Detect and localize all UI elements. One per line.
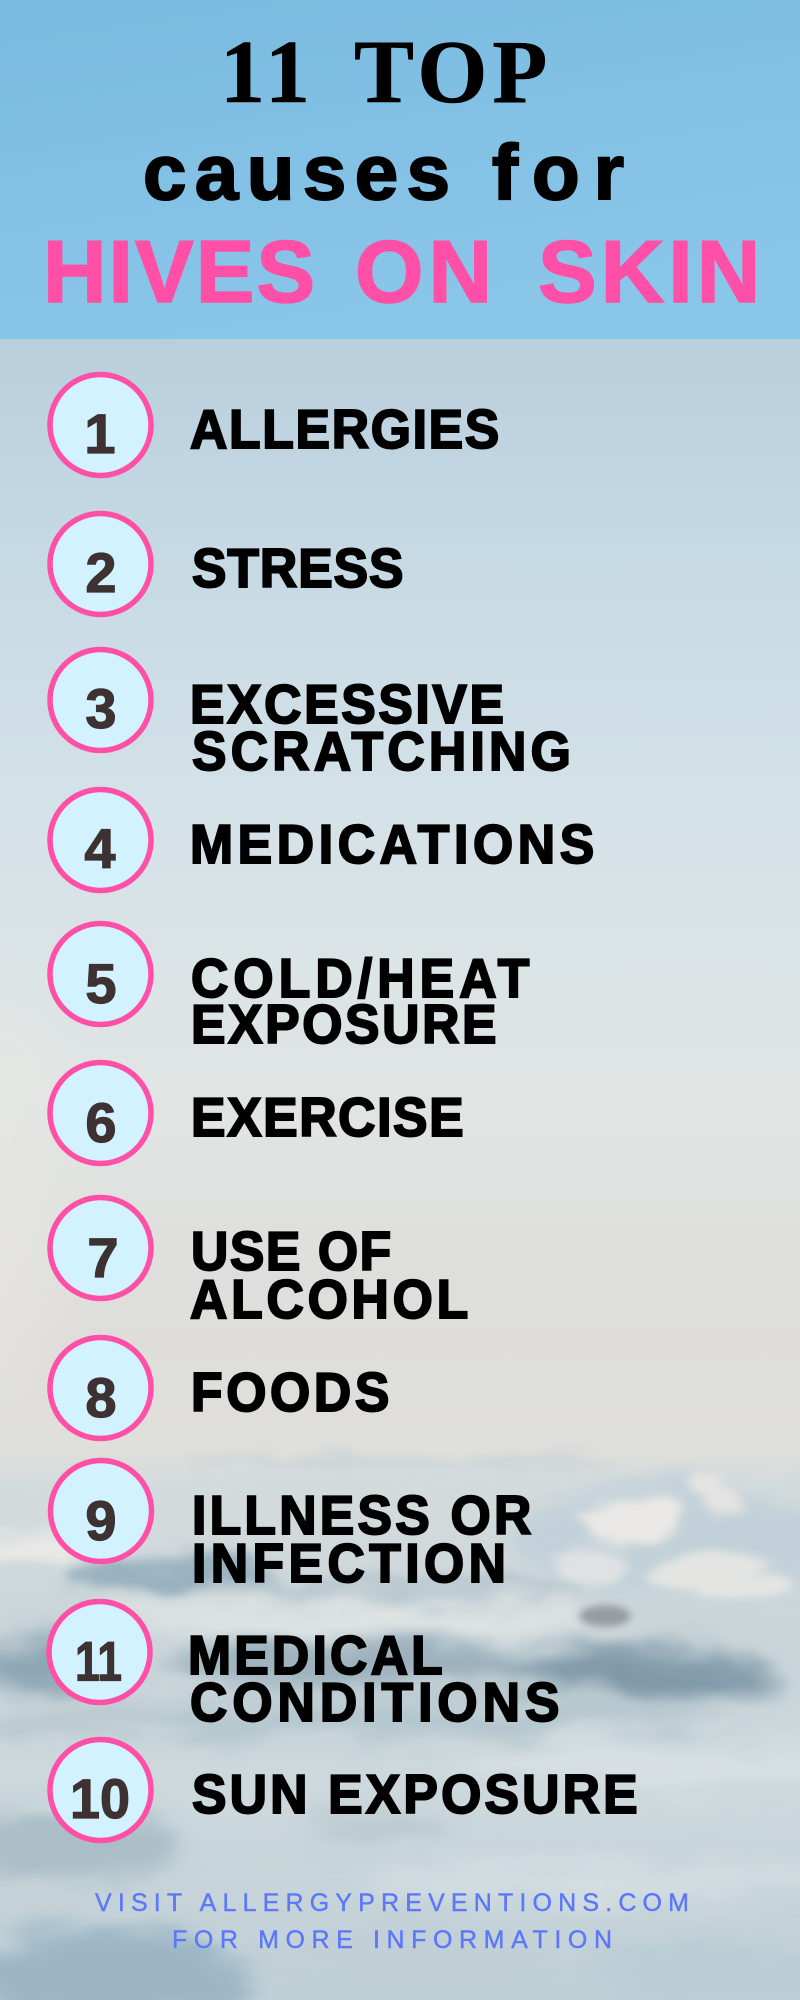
label: cold/heat exposure: EXPOSURE	[191, 995, 497, 1055]
label: use of alcohol	[190, 1222, 468, 1330]
badge 4	[50, 790, 151, 890]
label: medical conditions: MEDICAL	[188, 1626, 443, 1686]
label: medical conditions: CONDITIONS	[190, 1673, 559, 1733]
badge 9	[50, 1460, 152, 1562]
label: excessive scratching	[190, 675, 571, 782]
footer line 2: FOR MORE INFORMATION	[172, 1926, 612, 1954]
badge 1	[50, 374, 151, 476]
label: illness or infection: INFECTION	[192, 1534, 506, 1594]
label: cold/heat exposure	[191, 949, 530, 1055]
badge 1: 1	[84, 402, 116, 465]
item 1: allergies	[50, 374, 499, 476]
item 7: use of alcohol	[50, 1198, 468, 1330]
footer call to action	[95, 1889, 689, 1954]
badge 6: 6	[85, 1091, 117, 1154]
label: medications: MEDICATIONS	[190, 815, 594, 875]
badge 9: 9	[85, 1489, 117, 1552]
badge 7	[50, 1198, 151, 1298]
badge 11: 11	[75, 1630, 122, 1692]
badge 3	[50, 650, 151, 750]
item 10: sun exposure	[50, 1740, 638, 1840]
title line 2: causes for: causes	[143, 128, 459, 216]
title line 3: HIVES ON SKIN: ON	[355, 222, 497, 321]
badge 11	[49, 1602, 150, 1702]
badge 10	[50, 1740, 151, 1840]
label: excessive scratching: EXCESSIVE	[190, 675, 504, 735]
label: excessive scratching: SCRATCHING	[192, 722, 571, 782]
item 4: medications	[50, 790, 594, 890]
badge 8: 8	[85, 1366, 117, 1429]
badge 2: 2	[85, 541, 117, 604]
badge 5: 5	[85, 952, 117, 1015]
label: use of alcohol: ALCOHOL	[190, 1270, 468, 1330]
title line 1: 11 TOP: 11	[220, 23, 315, 122]
title line 3: HIVES ON SKIN: HIVES	[43, 222, 317, 321]
item 8: foods	[50, 1338, 389, 1438]
label: illness or infection	[192, 1486, 531, 1594]
footer line 1: VISIT ALLERGYPREVENTIONS.COM	[95, 1889, 689, 1917]
label: cold/heat exposure: COLD/HEAT	[191, 949, 530, 1009]
cloud layer	[0, 1458, 800, 2000]
badge 5	[50, 924, 151, 1024]
label: allergies: ALLERGIES	[190, 400, 499, 460]
title line 3: HIVES ON SKIN: SKIN	[538, 222, 764, 321]
label: stress: STRESS	[192, 539, 403, 599]
label: use of alcohol: USE OF	[191, 1222, 391, 1282]
item 11: medical conditions	[49, 1602, 559, 1733]
item 6: exercise	[50, 1062, 464, 1164]
badge 3: 3	[85, 677, 117, 740]
badge 2	[50, 514, 151, 614]
title line 2: causes for: for	[492, 128, 638, 216]
label: sun exposure: SUN EXPOSURE	[192, 1765, 638, 1825]
item 5: cold/heat exposure	[50, 924, 530, 1055]
label: illness or infection: ILLNESS OR	[192, 1486, 531, 1546]
header band	[0, 0, 800, 339]
badge 7: 7	[87, 1226, 119, 1289]
badge 4: 4	[84, 817, 116, 880]
badge 6	[50, 1062, 151, 1164]
badge 8	[50, 1338, 151, 1438]
label: medical conditions	[188, 1626, 559, 1733]
title	[43, 23, 764, 321]
label: foods: FOODS	[191, 1363, 389, 1423]
item 9: illness or infection	[50, 1460, 531, 1594]
title line 1: 11 TOP: TOP	[354, 23, 552, 122]
item 2: stress	[50, 514, 404, 614]
label: exercise: EXERCISE	[191, 1088, 464, 1148]
badge 10: 10	[70, 1767, 130, 1830]
item 3: excessive scratching	[50, 650, 571, 782]
